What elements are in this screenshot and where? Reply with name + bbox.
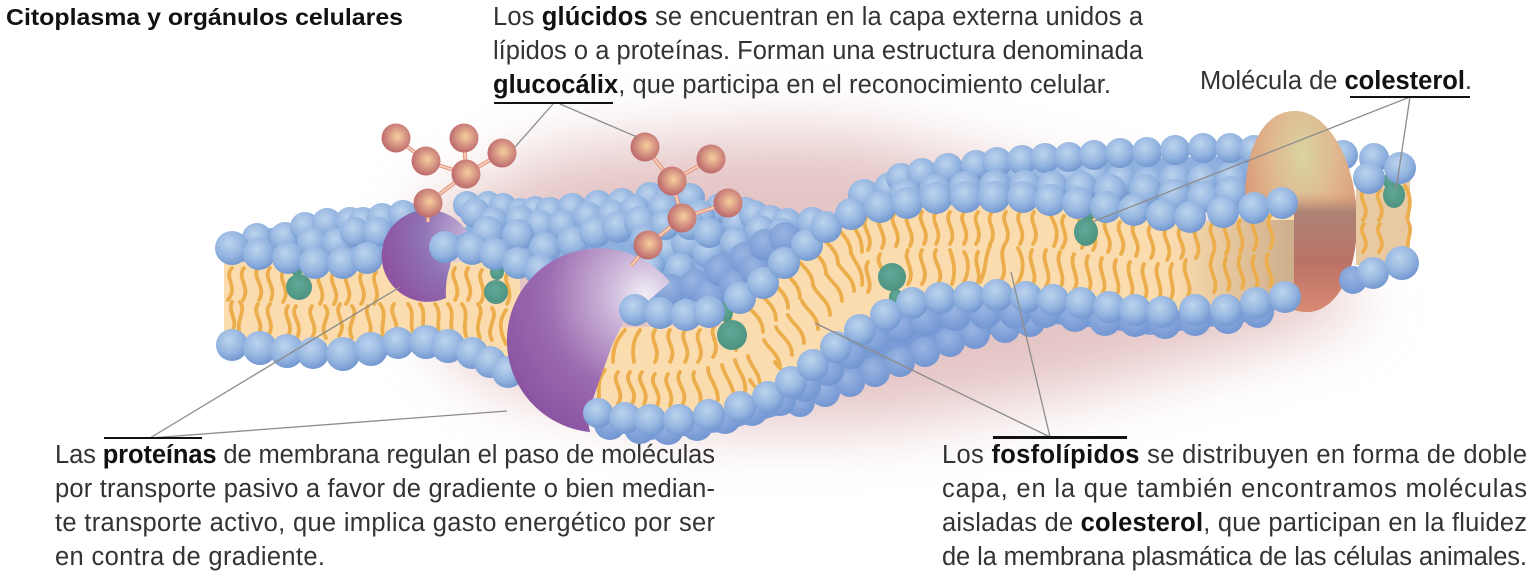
- cholesterol molecules left: [286, 258, 508, 304]
- text: fosfolípidos: capa, en la que también encontramos moléculas: [942, 475, 1527, 503]
- lower surface backing: [600, 290, 1290, 440]
- text: glúcidos: [493, 3, 1144, 104]
- text: fosfolípidos: Los fosfolípidos se distribuyen en forma de doble: [942, 441, 1527, 469]
- shaded heads in the fold: [654, 222, 801, 311]
- text: proteínas: en contra de gradiente.: [55, 543, 325, 571]
- background glow behind membrane: [420, 135, 1370, 425]
- integral protein: orange: [1245, 111, 1357, 312]
- text: proteínas: Las proteínas de membrana regulan el paso de moléculas: [55, 441, 715, 469]
- protein: large purple sphere: [507, 248, 670, 432]
- glycan chain left: [382, 124, 516, 222]
- leader lines: [150, 97, 1410, 438]
- back surface backing: [240, 155, 1285, 312]
- text: colesterol: Molécula de colesterol.: [1200, 67, 1472, 95]
- lower heads under the membrane: [594, 296, 1274, 445]
- right stub of bilayer: [1339, 152, 1419, 294]
- membrane illustration: [215, 111, 1419, 445]
- cholesterol molecules right: [717, 203, 1098, 350]
- glycan chain right: [630, 132, 742, 266]
- text: proteínas: [55, 437, 716, 571]
- text: fosfolípidos: [942, 436, 1527, 571]
- text: proteínas: te transporte activo, que implica gasto energético por ser: [55, 509, 716, 537]
- protein: small purple sphere: [382, 210, 467, 302]
- text: glúcidos: Los glúcidos se encuentran en la capa externa unidos a: [493, 3, 1144, 31]
- text: glúcidos: glucocálix, que participa en el reconocimiento celular.: [493, 71, 1111, 99]
- text: fosfolípidos: aisladas de colesterol, que participan en la fluidez: [942, 509, 1527, 537]
- back phospholipid heads: [242, 133, 1389, 283]
- text: fosfolípidos: de la membrana plasmática de las células animales.: [942, 543, 1527, 571]
- front head rows: [583, 181, 1301, 436]
- right lipid band: [592, 203, 1294, 422]
- title: Citoplasma y orgánulos celulares: [6, 4, 403, 30]
- middle head row: [429, 231, 556, 286]
- left lipid band: [224, 262, 520, 372]
- text: proteínas: por transporte pasivo a favor de gradiente o bien median-: [55, 475, 715, 503]
- left head rows: [215, 231, 524, 388]
- text: glúcidos: lípidos o a proteínas. Forman una estructura denominada: [493, 37, 1144, 65]
